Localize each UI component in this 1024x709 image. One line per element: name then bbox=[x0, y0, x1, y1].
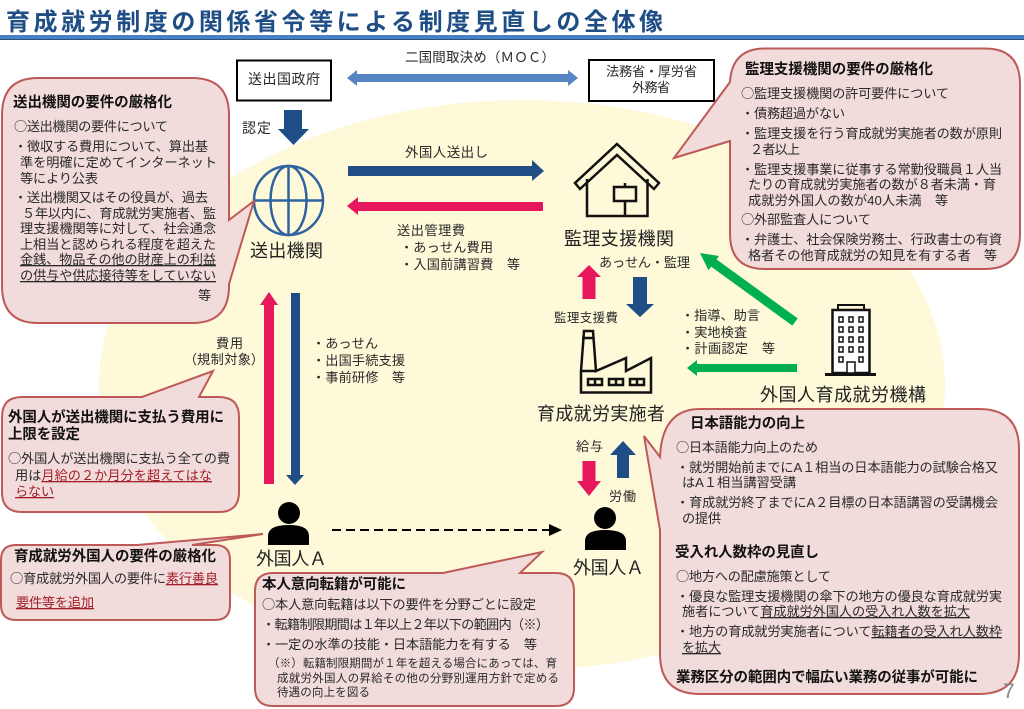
panel: Japanese ability and acceptance limits: ・優良な監理支援機関の傘下の地方の優良な育成就労実 bbox=[676, 589, 1002, 604]
arrow: cost to sending organization: 費用 bbox=[216, 336, 243, 351]
panel: voluntary job change: ・一定の水準の技能・日本語能力を有する 等 bbox=[262, 636, 537, 652]
panel: sending organization requirements: ○送出機関の要件について bbox=[14, 116, 168, 135]
label: supervising organization: 監理支援機関 bbox=[564, 229, 674, 249]
icon: house bbox=[575, 144, 659, 216]
arrow: certification: 認定 bbox=[242, 120, 271, 136]
arrow: supervision fee: 監理支援費 bbox=[554, 310, 618, 325]
background ellipse bbox=[99, 100, 945, 670]
title bbox=[0, 9, 1024, 40]
panel: supervising organization requirements bbox=[674, 48, 1020, 269]
arrow: labor: 労働 bbox=[609, 489, 636, 504]
icon: factory bbox=[581, 331, 651, 392]
panel: worker requirements: ○育成就労外国人の要件に素行善良 bbox=[10, 568, 218, 587]
arrow: salary: 給与 bbox=[576, 439, 603, 454]
arrow: sending foreign workers bbox=[348, 145, 544, 181]
box: sending government bbox=[237, 60, 331, 100]
panel: Japanese ability and acceptance limits: 受入れ人数枠の見直し bbox=[675, 543, 819, 561]
arrow: services to worker: ・事前研修 等 bbox=[312, 369, 405, 385]
panel: supervising organization requirements: ・監理支援事業に従事する常勤役職員１人当 bbox=[741, 162, 1002, 177]
panel: worker requirements: 育成就労外国人の要件の厳格化 bbox=[14, 547, 216, 565]
panel: supervising organization requirements: ○監理支援機関の許可要件について bbox=[741, 83, 949, 102]
person: foreign worker A left: 外国人Ａ bbox=[256, 549, 327, 569]
panel: voluntary job change: ・転籍制限期間は１年以上２年以下の範囲内（※） bbox=[262, 616, 549, 632]
arrow: services to worker: ・出国手続支援 bbox=[312, 353, 405, 368]
person: foreign worker A right: 外国人Ａ bbox=[573, 558, 644, 578]
label: implementer: 育成就労実施者 bbox=[537, 404, 665, 424]
panel: supervising organization requirements: たりの育成就労実施者の数が８者未満・育 bbox=[748, 177, 996, 192]
arrow: sending management fee: ・あっせん費用 bbox=[400, 240, 493, 255]
arrow: guidance to implementer bbox=[687, 360, 797, 376]
panel: sending organization requirements bbox=[2, 78, 254, 323]
panel: worker requirements bbox=[1, 534, 263, 620]
guidance list: ・実地検査 bbox=[681, 325, 747, 340]
panel: sending organization requirements: ・徴収する費用について、算出基 bbox=[14, 139, 208, 154]
panel: voluntary job change: （※）転籍制限期間が１年を超える場合にあっては、育 bbox=[268, 656, 557, 670]
panel: voluntary job change: 待遇の向上を図る bbox=[277, 685, 370, 699]
panel: sending organization requirements: 送出機関の要件の厳格化 bbox=[13, 93, 172, 111]
panel: fee cap: らない bbox=[15, 484, 54, 499]
panel: sending organization requirements: 理支援機関等に対して、社会通念 bbox=[20, 220, 216, 236]
panel: supervising organization requirements: 成就労外国人の数が40人未満 等 bbox=[748, 192, 948, 208]
arrow: supervision fee bbox=[554, 265, 618, 325]
box: Japanese ministries: 外務省 bbox=[632, 80, 670, 95]
arrow: MOC two-way: 二国間取決め（ＭＯＣ） bbox=[405, 50, 555, 65]
panel: voluntary job change: 成就労外国人の昇給その他の分野別運用方針で定める bbox=[277, 671, 559, 685]
panel: voluntary job change: 本人意向転籍が可能に bbox=[262, 575, 406, 593]
label: OTIT organization: 外国人育成就労機構 bbox=[760, 385, 926, 405]
panel: sending organization requirements: の供与や供応接待等をしていない bbox=[20, 267, 216, 283]
arrow: placement down bbox=[626, 277, 654, 317]
panel: Japanese ability and acceptance limits: 日本語能力の向上 bbox=[690, 414, 805, 432]
panel: sending organization requirements: 金銭、物品その他の財産上の利益 bbox=[20, 252, 216, 267]
title: 育成就労制度の関係省令等による制度見直しの全体像 bbox=[6, 9, 663, 36]
panel: Japanese ability and acceptance limits: 施者について育成就労外国人の受入れ人数を拡大 bbox=[682, 604, 970, 619]
panel: sending organization requirements: 等により公表 bbox=[20, 170, 98, 186]
panel: voluntary job change bbox=[255, 552, 574, 706]
arrow: cost to sending organization bbox=[190, 292, 278, 484]
arrow: services to worker bbox=[286, 293, 405, 485]
icon: office building bbox=[825, 305, 876, 376]
panel: supervising organization requirements: 格者その他育成就労の知見を有する者 等 bbox=[748, 247, 997, 263]
panel: fee cap: ○外国人が送出機関に支払う全ての費 bbox=[8, 448, 230, 467]
panel: supervising organization requirements: ・債務超過がない bbox=[741, 106, 845, 121]
panel: voluntary job change: ○本人意向転籍は以下の要件を分野ごとに設定 bbox=[262, 594, 536, 613]
arrow: cost to sending organization: （規制対象） bbox=[190, 352, 258, 367]
panel: fee cap: 上限を設定 bbox=[8, 426, 80, 443]
panel: supervising organization requirements: ２者以上 bbox=[750, 142, 800, 157]
panel: Japanese ability and acceptance limits: 業務区分の範囲内で幅広い業務の従事が可能に bbox=[676, 668, 978, 686]
icon: globe bbox=[254, 166, 323, 235]
panel: supervising organization requirements: ○外部監査人について bbox=[741, 209, 871, 228]
page number: 7 bbox=[1003, 680, 1015, 703]
arrow: sending management fee: ・入国前講習費 等 bbox=[400, 256, 520, 272]
guidance list bbox=[681, 308, 775, 356]
panel: Japanese ability and acceptance limits: の提供 bbox=[682, 511, 721, 526]
panel: Japanese ability and acceptance limits: ○地方への配慮施策として bbox=[676, 566, 831, 585]
guidance list: ・計画認定 等 bbox=[681, 340, 775, 356]
arrow: MOC two-way bbox=[347, 50, 578, 86]
panel: worker requirements: 要件等を追加 bbox=[16, 594, 94, 610]
arrow: services to worker: ・あっせん bbox=[312, 336, 378, 351]
panel: fee cap: 用は月給の２か月分を超えてはな bbox=[15, 468, 212, 483]
panel: Japanese ability and acceptance limits bbox=[644, 409, 1019, 694]
panel: Japanese ability and acceptance limits: ・育成就労終了までにA２目標の日本語講習の受講機会 bbox=[676, 495, 998, 510]
arrow: certification bbox=[242, 110, 309, 145]
panel: fee cap: 外国人が送出機関に支払う費用に bbox=[8, 408, 224, 426]
panel: supervising organization requirements: ・監理支援を行う育成就労実施者の数が原則 bbox=[741, 126, 1002, 141]
arrow: dashed job change bbox=[332, 524, 562, 536]
panel: supervising organization requirements: 監理支援機関の要件の厳格化 bbox=[745, 60, 934, 78]
label: sending organization: 送出機関 bbox=[250, 241, 323, 261]
arrow: labor bbox=[609, 441, 636, 504]
person: foreign worker A right bbox=[573, 507, 644, 578]
panel: Japanese ability and acceptance limits: を拡大 bbox=[682, 640, 721, 655]
arrow: salary bbox=[576, 439, 603, 496]
person: foreign worker A left bbox=[256, 502, 327, 569]
panel: sending organization requirements: 上相当と認められる程度を超えた bbox=[20, 237, 216, 252]
panel: fee cap bbox=[2, 371, 239, 512]
arrow: sending foreign workers: 外国人送出し bbox=[405, 145, 488, 160]
panel: sending organization requirements: ・送出機関又はその役員が、過去 bbox=[14, 190, 208, 205]
panel: Japanese ability and acceptance limits: ○日本語能力向上のため bbox=[676, 437, 818, 456]
panel: Japanese ability and acceptance limits: ・就労開始前までにA１相当の日本語能力の試験合格又 bbox=[676, 459, 998, 475]
label: placement and supervision: あっせん・監理 bbox=[599, 255, 690, 270]
panel: sending organization requirements: 等 bbox=[198, 287, 211, 303]
panel: supervising organization requirements: ・弁護士、社会保険労務士、行政書士の有資 bbox=[741, 232, 1002, 247]
arrow: sending management fee bbox=[347, 197, 543, 272]
panel: Japanese ability and acceptance limits: はA１相当講習受講 bbox=[682, 475, 796, 490]
panel: Japanese ability and acceptance limits: ・地方の育成就労実施者について転籍者の受入れ人数枠 bbox=[676, 623, 1002, 639]
panel: sending organization requirements: ５年以内に、育成就労実施者、監 bbox=[22, 206, 216, 221]
arrow: guidance to supervising organization bbox=[700, 253, 798, 326]
guidance list: ・指導、助言 bbox=[681, 308, 760, 323]
arrow: sending management fee: 送出管理費 bbox=[397, 223, 465, 238]
box: sending government: 送出国政府 bbox=[248, 71, 320, 87]
box: Japanese ministries bbox=[589, 60, 714, 101]
panel: sending organization requirements: 準を明確に定めてインターネット bbox=[20, 155, 217, 170]
box: Japanese ministries: 法務省・厚労省 bbox=[606, 64, 697, 79]
